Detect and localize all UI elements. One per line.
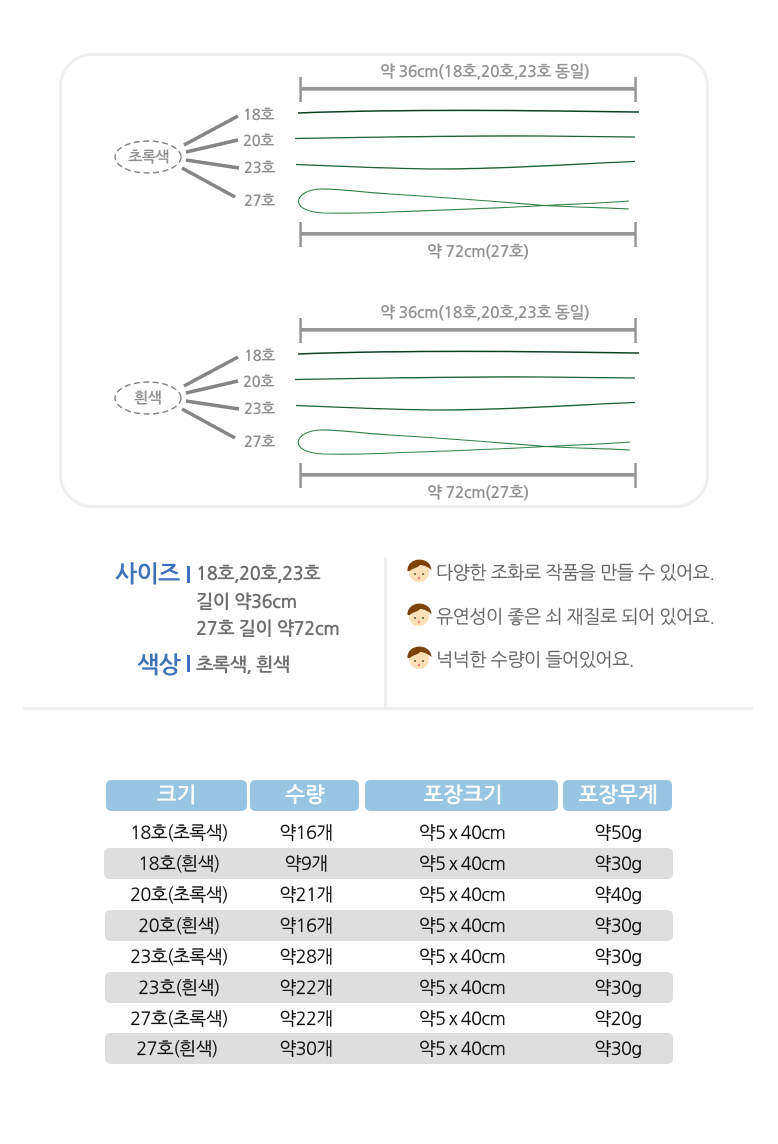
wire: 27 white loop [298, 430, 630, 454]
oval label: green: 초록색 [128, 149, 169, 165]
row: 27 green: 27호(초록색) [130, 1010, 228, 1028]
table header: 크기 [157, 784, 196, 806]
row: 20 white [138, 917, 642, 935]
row: 18 white: 약30g [594, 855, 642, 873]
row: 20 white: 약16개 [279, 917, 333, 935]
text: size values: 18호,20호,23호 [196, 564, 320, 583]
table header: 수량 [285, 784, 325, 806]
row: 23 white: 약22개 [279, 979, 333, 997]
row: 20 white: 약30g [594, 917, 642, 935]
table header [106, 780, 672, 811]
oval label: green [115, 141, 181, 173]
top measure bar: 36cm [299, 77, 637, 102]
row: 18 white: 약5 x 40cm [419, 855, 505, 873]
size labels: white: 18호 [244, 348, 275, 364]
row: 20 green [130, 886, 642, 904]
row: 18 green: 약50g [594, 824, 642, 842]
size labels: green: 20호 [243, 133, 274, 149]
row: 27 white [136, 1040, 642, 1058]
row: 23 green: 약28개 [279, 948, 333, 966]
row: 18 green [130, 824, 642, 842]
feature 2 [407, 604, 714, 626]
row: 20 green: 약21개 [279, 886, 333, 904]
row: 18 white: 약9개 [285, 855, 327, 873]
size labels: green [243, 107, 275, 209]
group: green wire diagram [115, 63, 639, 260]
text: size values: 길이 약36cm [196, 592, 297, 611]
row: 27 green [130, 1010, 642, 1028]
row: 23 white: 23호(흰색) [138, 979, 220, 997]
row: 20 green: 20호(초록색) [130, 886, 228, 904]
row: 23 green: 23호(초록색) [130, 948, 228, 966]
label: 36cm length: 약 36cm(18호,20호,23호 동일) [380, 304, 589, 321]
branch lines: green [182, 116, 239, 197]
panel: product diagram [60, 54, 708, 506]
row stripes [104, 848, 673, 1064]
size labels: green: 27호 [244, 193, 275, 209]
size labels: white: 27호 [244, 434, 275, 450]
heading: color: 색상 [137, 653, 181, 677]
wire: 27 green loop [299, 189, 629, 213]
panel: features [407, 560, 714, 669]
row: 20 white: 20호(흰색) [138, 917, 220, 935]
wire: 23 green [296, 162, 635, 169]
text: feature: 다양한 조화로 작품을 만들 수 있어요. [436, 563, 714, 582]
feature 3 [407, 647, 634, 669]
size labels: white: 23호 [244, 401, 275, 417]
bottom measure bar: 72cm [299, 222, 637, 247]
size labels: white: 20호 [243, 374, 274, 390]
text: size values: 27호 길이 약72cm [196, 619, 339, 638]
row: 18 green: 18호(초록색) [130, 824, 228, 842]
row: 18 green: 약16개 [279, 824, 333, 842]
row: 27 green: 약20g [594, 1010, 642, 1028]
row: 27 white: 약30g [594, 1040, 642, 1058]
row: 27 green: 약22개 [279, 1010, 333, 1028]
branch lines: white [182, 357, 239, 438]
text: feature: 넉넉한 수량이 들어있어요. [436, 650, 634, 669]
row: 27 green: 약5 x 40cm [419, 1010, 505, 1028]
row: 23 green [130, 948, 642, 966]
size labels: white [243, 348, 275, 450]
table: specifications [104, 780, 673, 1064]
row: 23 white [138, 979, 642, 997]
row: 20 white: 약5 x 40cm [419, 917, 505, 935]
row: 18 green: 약5 x 40cm [419, 824, 505, 842]
icon: boy face [407, 560, 432, 582]
row: 23 white: 약5 x 40cm [419, 979, 505, 997]
table header: 포장무게 [579, 784, 657, 806]
row: 23 green: 약30g [594, 948, 642, 966]
top measure bar: 36cm [299, 318, 637, 343]
size labels: green: 18호 [243, 107, 274, 123]
row: 23 green: 약5 x 40cm [419, 948, 505, 966]
wire: 20 green [295, 136, 635, 138]
row: 27 white: 27호(흰색) [136, 1040, 218, 1058]
label: 72cm length: 약 72cm(27호) [427, 243, 529, 260]
wire: 23 white [296, 402, 635, 410]
group: white wire diagram [115, 304, 639, 501]
label: 36cm length: 약 36cm(18호,20호,23호 동일) [380, 63, 589, 80]
row: 20 green: 약5 x 40cm [419, 886, 505, 904]
table header: 포장크기 [424, 784, 502, 806]
row: 18 white [138, 855, 642, 873]
text: size values [196, 564, 339, 638]
size labels: green: 23호 [244, 160, 275, 176]
bottom measure bar: 72cm [299, 463, 637, 488]
row: 27 white: 약30개 [279, 1040, 333, 1058]
row: 27 white: 약5 x 40cm [419, 1040, 505, 1058]
text: color values: 초록색, 흰색 [196, 655, 290, 674]
row: 18 white: 18호(흰색) [138, 855, 220, 873]
wire: 18 white [298, 351, 639, 354]
text: feature: 유연성이 좋은 쇠 재질로 되어 있어요. [436, 607, 714, 626]
row: 23 white: 약30g [594, 979, 642, 997]
oval label: white: 흰색 [134, 390, 161, 406]
oval label: white [115, 382, 181, 414]
icon: boy face [407, 647, 432, 669]
label: 72cm length: 약 72cm(27호) [427, 484, 529, 501]
row: 20 green: 약40g [594, 886, 642, 904]
panel: specification summary [115, 562, 339, 677]
icon: boy face [407, 604, 432, 626]
heading: size: 사이즈 [115, 562, 180, 586]
wire: 18 green [298, 110, 639, 113]
feature 1 [407, 560, 714, 582]
wire: 20 white [295, 377, 635, 380]
